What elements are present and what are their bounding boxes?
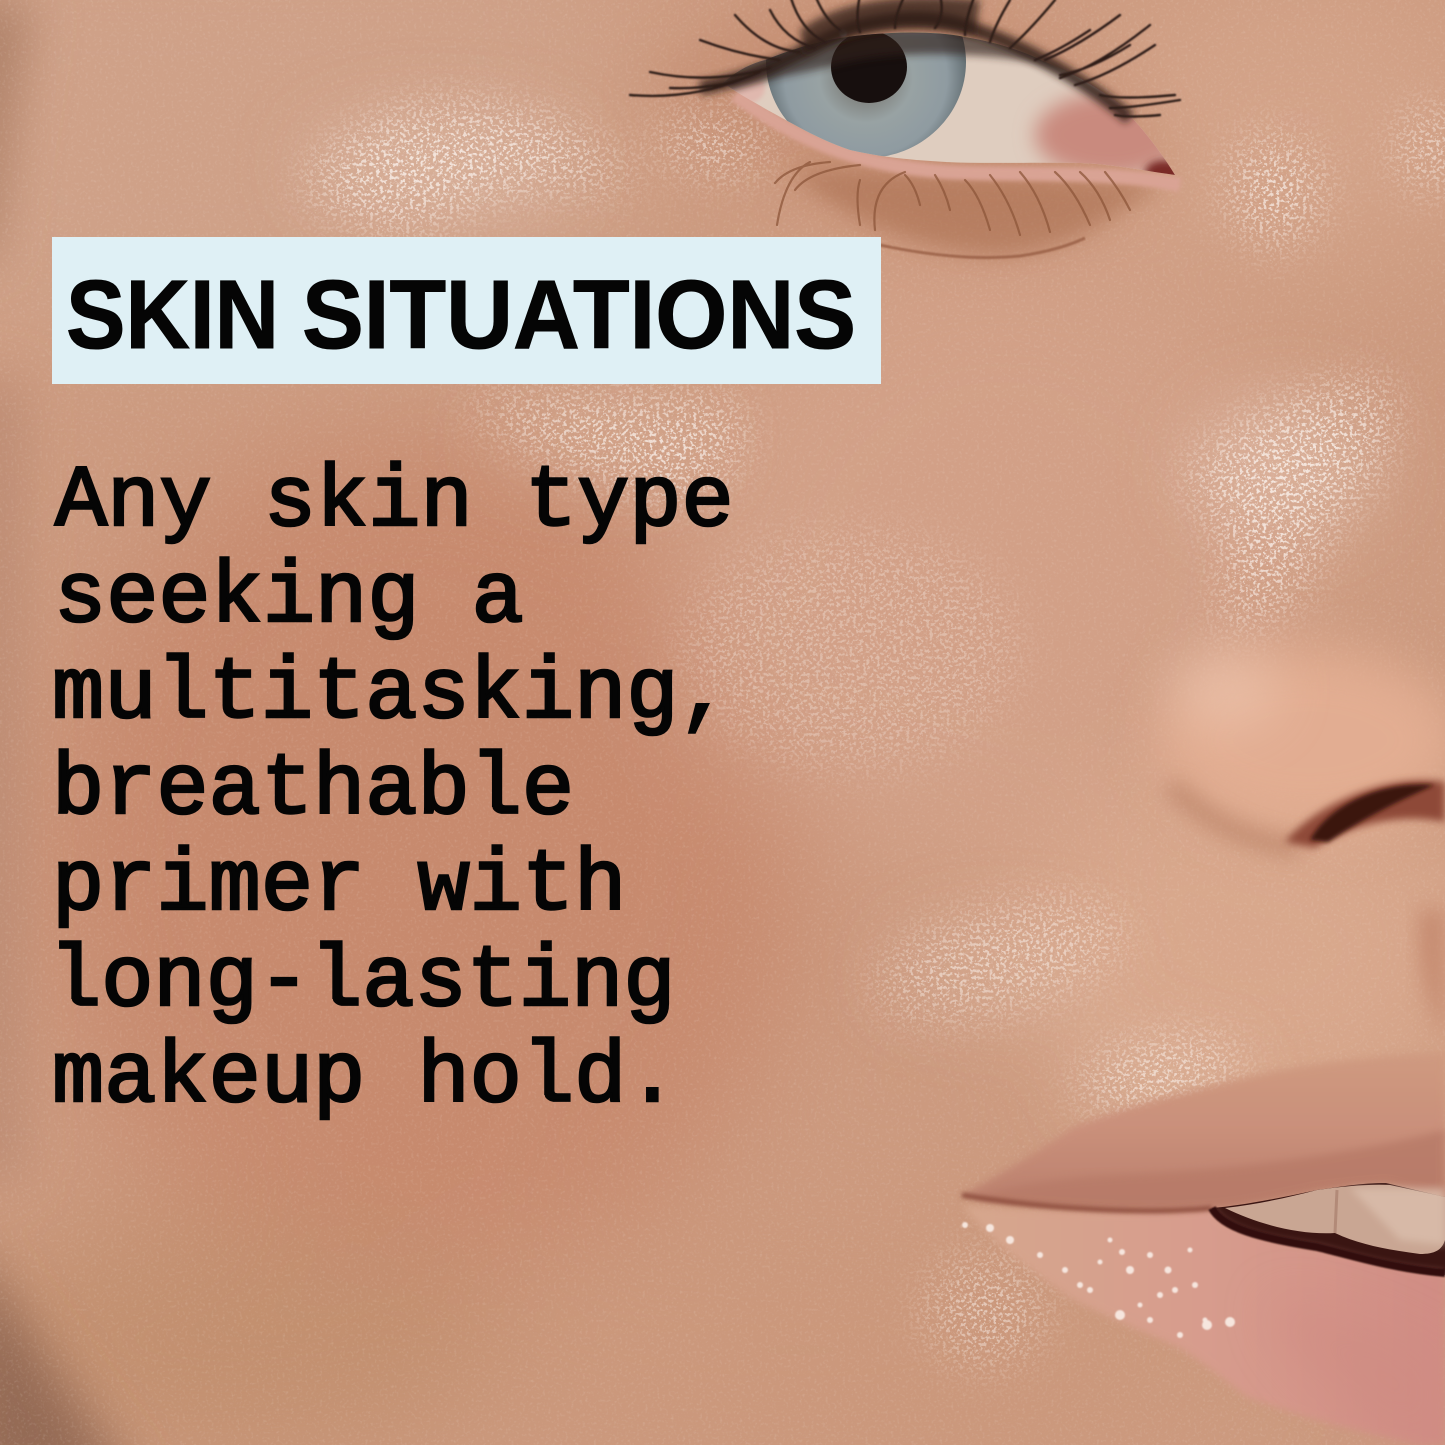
upper lip xyxy=(962,1052,1445,1210)
soft skin sheen xyxy=(310,125,1375,1102)
body text block: Any skin type xyxy=(55,454,734,552)
lower lid xyxy=(735,95,1180,185)
specular highlights xyxy=(286,78,1445,1388)
eyeball xyxy=(723,33,1175,175)
mouth interior xyxy=(1212,1183,1445,1275)
mouth line xyxy=(962,1195,1212,1211)
body text block: multitasking, xyxy=(52,646,731,744)
body text block: primer with xyxy=(52,838,626,936)
upper lash mass xyxy=(700,18,1130,118)
eye xyxy=(630,0,1185,258)
lower lip xyxy=(962,1205,1445,1445)
nose xyxy=(1160,650,1445,1040)
heading: SKIN SITUATIONS: SKIN xyxy=(66,260,279,369)
teeth xyxy=(1225,1185,1445,1254)
lips xyxy=(962,1052,1445,1445)
body text block: breathable xyxy=(52,742,574,840)
eyelashes xyxy=(630,0,1180,116)
face edge shadows xyxy=(0,0,140,1445)
body text block: seeking a xyxy=(54,550,524,648)
heading: SKIN SITUATIONS: SITUATIONS xyxy=(302,260,856,369)
body text block: long-lasting xyxy=(49,934,676,1032)
lower lashes xyxy=(775,162,1130,235)
body text block: makeup hold. xyxy=(52,1030,679,1128)
under-eye crease xyxy=(800,170,1160,256)
heading: SKIN SITUATIONS xyxy=(52,237,881,384)
lip gloss dots xyxy=(962,1222,1235,1338)
body text block xyxy=(49,454,734,1128)
